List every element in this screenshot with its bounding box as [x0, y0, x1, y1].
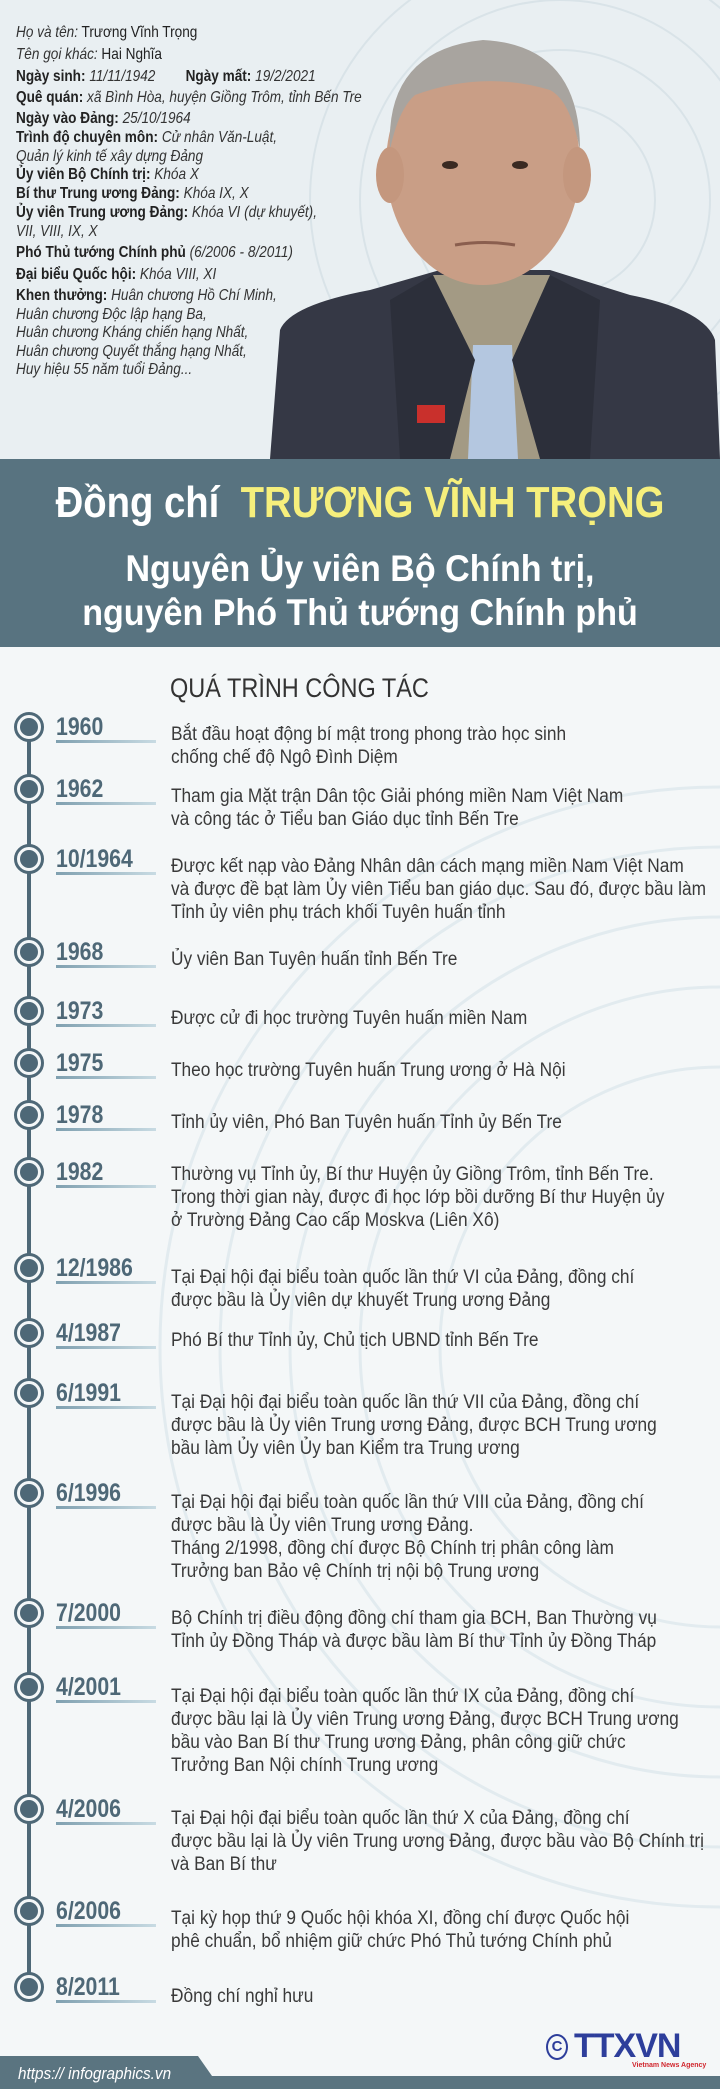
item 6/1996: Tại Đại hội đại biểu toàn quốc lần thứ VIII của Đảng, đồng chí	[171, 1492, 644, 1513]
item 1982: ở Trường Đảng Cao cấp Moskva (Liên Xô)	[171, 1210, 499, 1231]
item 10/1964: Được kết nạp vào Đảng Nhân dân cách mạng miền Nam Việt Nam	[171, 856, 684, 877]
item 7/2000	[14, 1598, 657, 1652]
item 1968: Ủy viên Ban Tuyên huấn tỉnh Bến Tre	[171, 949, 457, 970]
item 4/2006: và Ban Bí thư	[171, 1854, 277, 1875]
item 6/2006: phê chuẩn, bổ nhiệm giữ chức Phó Thủ tướng Chính phủ	[171, 1931, 612, 1952]
personal info text block: Quản lý kinh tế xây dựng Đảng	[16, 148, 203, 165]
item 1982	[14, 1157, 664, 1231]
item 6/1991: 6/1991	[56, 1379, 121, 1407]
top background with photo	[0, 0, 720, 459]
item 4/2006: 4/2006	[56, 1795, 121, 1823]
item 1960	[14, 712, 566, 768]
item 1975: Theo học trường Tuyên huấn Trung ương ở Hà Nội	[171, 1060, 566, 1081]
personal info text block: Quê quán: xã Bình Hòa, huyện Giồng Trôm, tỉnh Bến Tre	[16, 89, 362, 106]
title band	[0, 459, 720, 647]
personal info text block: Ngày vào Đảng: 25/10/1964	[16, 110, 191, 127]
personal info text block: Ủy viên Bộ Chính trị: Khóa X	[16, 166, 199, 183]
item 8/2011: 8/2011	[56, 1973, 120, 2001]
personal info text block	[16, 24, 362, 378]
item 1978	[14, 1100, 562, 1133]
item 6/1996	[14, 1478, 644, 1582]
logo: TTXVN: Vietnam News Agency	[632, 2062, 706, 2069]
item 7/2000: 7/2000	[56, 1599, 121, 1627]
item 4/2001: Tại Đại hội đại biểu toàn quốc lần thứ IX của Đảng, đồng chí	[171, 1686, 634, 1707]
item 4/1987	[14, 1318, 538, 1351]
personal info text block: Huân chương Kháng chiến hạng Nhất,	[16, 324, 248, 341]
item 12/1986	[14, 1253, 634, 1311]
item 1978: 1978	[56, 1101, 103, 1129]
item 1982: 1982	[56, 1158, 103, 1186]
item 1962: Tham gia Mặt trận Dân tộc Giải phóng miền Nam Việt Nam	[171, 786, 623, 807]
personal info text block: Họ và tên: Trương Vĩnh Trọng	[16, 24, 197, 41]
item 6/2006: Tại kỳ họp thứ 9 Quốc hội khóa XI, đồng chí được Quốc hội	[171, 1908, 629, 1929]
logo: TTXVN: TTXVN	[574, 2027, 680, 2065]
item 1982: Trong thời gian này, được đi học lớp bồi dưỡng Bí thư Huyện ủy	[171, 1187, 664, 1208]
item 10/1964: Tỉnh ủy viên phụ trách khối Tuyên huấn tỉnh	[171, 902, 505, 923]
item 8/2011: Đồng chí nghỉ hưu	[171, 1986, 313, 2007]
item 6/1996: được bầu là Ủy viên Trung ương Đảng.	[171, 1515, 473, 1536]
personal info text block: VII, VIII, IX, X	[16, 223, 98, 240]
item 7/2000: Tỉnh ủy Đồng Tháp và được bầu làm Bí thư Tỉnh ủy Đồng Tháp	[171, 1631, 656, 1652]
item 10/1964: và được đề bạt làm Ủy viên Tiểu ban giáo dục. Sau đó, được bầu làm	[171, 879, 706, 900]
timeline background pattern	[158, 786, 720, 1908]
item 1982: Thường vụ Tỉnh ủy, Bí thư Huyện ủy Giồng Trôm, tỉnh Bến Tre.	[171, 1164, 654, 1185]
personal info text block: Trình độ chuyên môn: Cử nhân Văn-Luật,	[16, 129, 277, 146]
item 4/2006: Tại Đại hội đại biểu toàn quốc lần thứ X của Đảng, đồng chí	[171, 1808, 630, 1829]
item 6/2006	[14, 1896, 629, 1952]
item 12/1986: được bầu là Ủy viên dự khuyết Trung ương Đảng	[171, 1290, 550, 1311]
personal info text block: Tên gọi khác: Hai Nghĩa	[16, 46, 162, 63]
photo: portrait	[270, 40, 720, 459]
subtitle: nguyên Phó Thủ tướng Chính phủ	[82, 592, 638, 633]
item 1968: 1968	[56, 938, 103, 966]
item 12/1986: Tại Đại hội đại biểu toàn quốc lần thứ VI của Đảng, đồng chí	[171, 1267, 634, 1288]
item 4/2006: được bầu lại là Ủy viên Trung ương Đảng, được bầu vào Bộ Chính trị	[171, 1831, 704, 1852]
item 6/1996: 6/1996	[56, 1479, 121, 1507]
logo: TTXVN	[546, 2027, 706, 2069]
item 1962: 1962	[56, 775, 103, 803]
item 6/1991	[14, 1378, 657, 1459]
item 1960: 1960	[56, 713, 103, 741]
item 6/1991: bầu làm Ủy viên Ủy ban Kiểm tra Trung ương	[171, 1438, 520, 1459]
item 10/1964: 10/1964	[56, 845, 133, 873]
item 6/2006: 6/2006	[56, 1897, 121, 1925]
personal info text block: Ngày sinh: 11/11/1942 Ngày mất: 19/2/2021	[16, 68, 316, 85]
section heading: QUÁ TRÌNH CÔNG TÁC	[170, 673, 429, 703]
personal info text block: Khen thưởng: Huân chương Hồ Chí Minh,	[16, 287, 277, 304]
item 6/1996: Tháng 2/1998, đồng chí được Bộ Chính trị phân công làm	[171, 1538, 614, 1559]
item 8/2011	[14, 1972, 313, 2007]
item 1968	[14, 937, 457, 970]
subtitle: Nguyên Ủy viên Bộ Chính trị,	[125, 548, 595, 589]
timeline vertical line	[27, 727, 31, 1987]
item 1978: Tỉnh ủy viên, Phó Ban Tuyên huấn Tỉnh ủy Bến Tre	[171, 1112, 562, 1133]
personal info text block: Ủy viên Trung ương Đảng: Khóa VI (dự khuyết),	[16, 204, 317, 221]
item 1960: Bắt đầu hoạt động bí mật trong phong trào học sinh	[171, 724, 566, 745]
item 4/2006	[14, 1794, 704, 1875]
footer url: https:// infographics.vn	[18, 2064, 171, 2083]
item 1975	[14, 1048, 566, 1081]
footer band	[0, 2056, 720, 2089]
item 1975: 1975	[56, 1049, 103, 1077]
item 4/2001: bầu vào Ban Bí thư Trung ương Đảng, phân công giữ chức	[171, 1732, 626, 1753]
item 4/2001: được bầu lại là Ủy viên Trung ương Đảng, được BCH Trung ương	[171, 1709, 679, 1730]
item 10/1964	[14, 844, 706, 923]
item 1960: chống chế độ Ngô Đình Diệm	[171, 747, 398, 768]
personal info text block: Huy hiệu 55 năm tuổi Đảng...	[16, 361, 192, 378]
item 6/1991: Tại Đại hội đại biểu toàn quốc lần thứ VII của Đảng, đồng chí	[171, 1392, 639, 1413]
item 4/2001: 4/2001	[56, 1673, 121, 1701]
personal info text block: Bí thư Trung ương Đảng: Khóa IX, X	[16, 185, 249, 202]
item 12/1986: 12/1986	[56, 1254, 133, 1282]
item 4/1987: Phó Bí thư Tỉnh ủy, Chủ tịch UBND tỉnh Bến Tre	[171, 1330, 538, 1351]
personal info text block: Huân chương Độc lập hạng Ba,	[16, 306, 207, 323]
item 1973: 1973	[56, 997, 103, 1025]
item 6/1996: Trưởng ban Bảo vệ Chính trị nội bộ Trung ương	[171, 1561, 539, 1582]
personal info text block: Huân chương Quyết thắng hạng Nhất,	[16, 343, 247, 360]
item 1973: Được cử đi học trường Tuyên huấn miền Nam	[171, 1008, 527, 1029]
item 4/2001	[14, 1672, 679, 1776]
personal info text block: Đại biểu Quốc hội: Khóa VIII, XI	[16, 266, 216, 283]
logo: TTXVN: C	[552, 2038, 562, 2055]
item 1962: và công tác ở Tiểu ban Giáo dục tỉnh Bến Tre	[171, 809, 519, 830]
subtitle	[82, 548, 638, 633]
personal info text block: Phó Thủ tướng Chính phủ (6/2006 - 8/2011)	[16, 244, 293, 261]
item 7/2000: Bộ Chính trị điều động đồng chí tham gia BCH, Ban Thường vụ	[171, 1608, 657, 1629]
timeline	[14, 712, 706, 2007]
item 1973	[14, 996, 527, 1029]
item 4/2001: Trưởng Ban Nội chính Trung ương	[171, 1755, 438, 1776]
main title: Đồng chí TRƯƠNG VĨNH TRỌNG	[56, 478, 664, 527]
item 4/1987: 4/1987	[56, 1319, 121, 1347]
item 1962	[14, 774, 623, 830]
item 6/1991: được bầu là Ủy viên Trung ương Đảng, được BCH Trung ương	[171, 1415, 657, 1436]
